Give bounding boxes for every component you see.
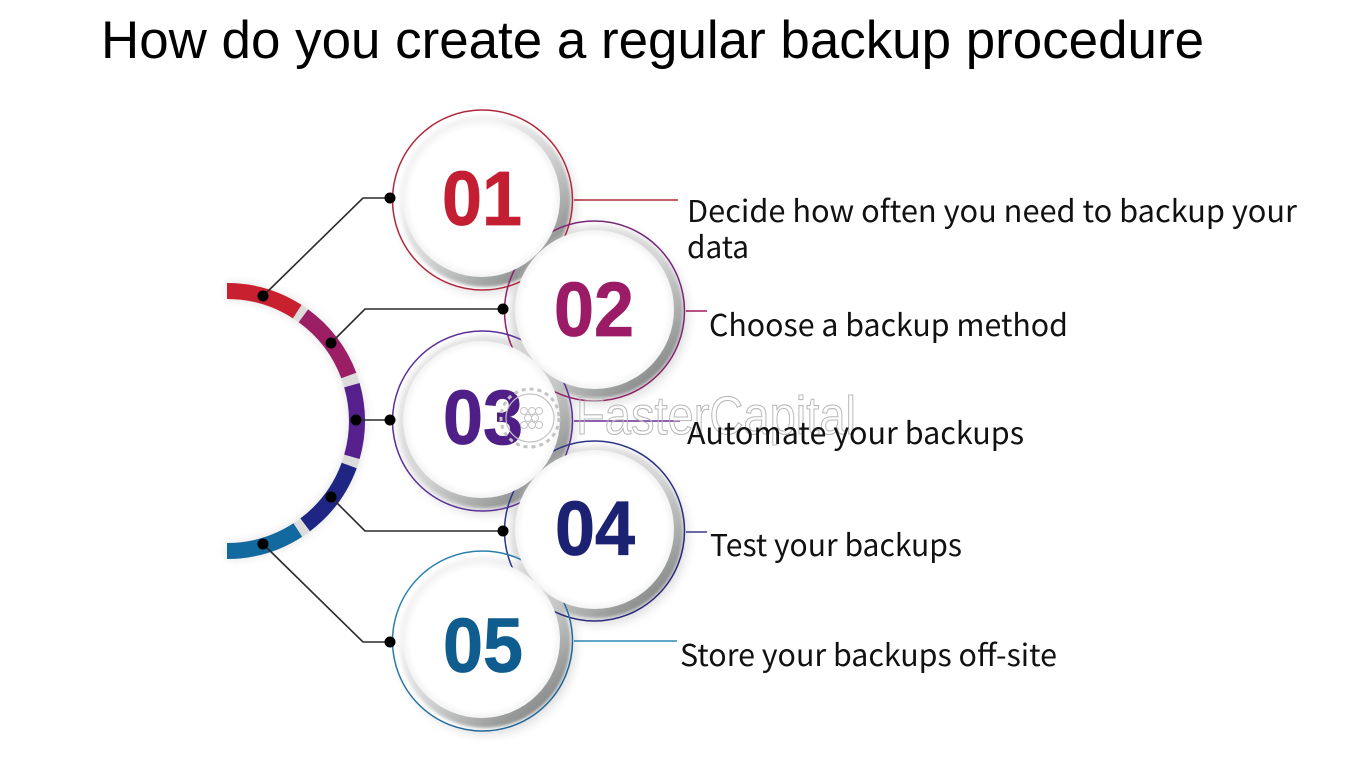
- circle shadows and rings: [392, 110, 688, 735]
- watermark gear icon: [501, 389, 559, 447]
- circle 05: [403, 561, 560, 718]
- title: How do you create a regular backup procedure: [101, 11, 1204, 70]
- number 05: 05: [443, 603, 523, 689]
- text: step 5: Store your backups off-site: [680, 631, 1057, 675]
- text: step 4: Test your backups: [710, 521, 962, 565]
- watermark: FasterCapital: [501, 386, 856, 447]
- circle 02: [515, 230, 674, 389]
- text: step 1: Decide how often you need to backup your: [687, 187, 1297, 231]
- connector dots: [258, 192, 508, 648]
- text: step 2: Choose a backup method: [709, 301, 1068, 345]
- number 01: 01: [442, 156, 522, 242]
- text: step 3: Automate your backups: [687, 409, 1024, 453]
- text: step 1: data: [687, 223, 749, 267]
- number 02: 02: [554, 267, 634, 353]
- watermark wordmark: FasterCapital: [576, 386, 856, 446]
- circle 03: [403, 341, 560, 498]
- callout lines: [574, 200, 707, 641]
- connector lines: [263, 198, 503, 642]
- circle 01: [403, 120, 560, 277]
- segmented arc: [227, 291, 357, 551]
- number 04: 04: [555, 486, 635, 572]
- text: step 1: [687, 187, 1297, 267]
- circle 04: [515, 450, 674, 609]
- number 03: 03: [443, 375, 523, 461]
